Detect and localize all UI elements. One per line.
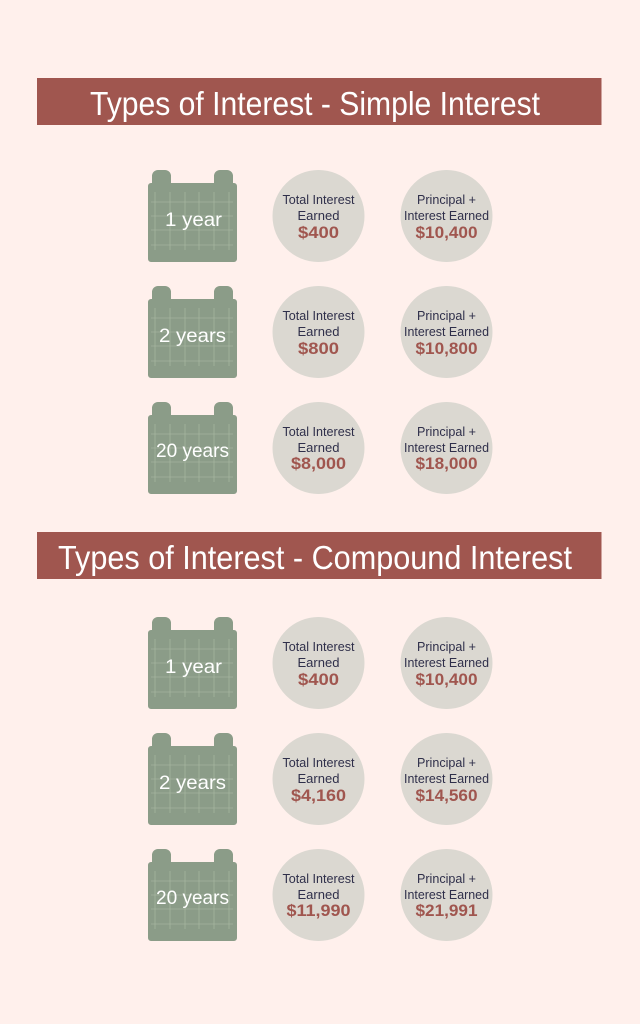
circle: principal plus interest $10,400: Interest Earned <box>404 208 489 223</box>
circle: total interest earned $11,990: Earned <box>298 887 340 902</box>
circle: total interest earned $400: $400 <box>298 670 339 689</box>
circle: total interest earned $11,990: $11,990 <box>286 901 350 920</box>
circle: principal plus interest $10,400: Interest Earned <box>404 655 489 670</box>
row: simple 20 years <box>148 402 492 494</box>
circle: principal plus interest $10,800: Principal + <box>417 308 476 323</box>
circle: principal plus interest $21,991 <box>400 849 492 941</box>
circle: total interest earned $8,000: $8,000 <box>291 454 346 473</box>
circle: principal plus interest $14,560 <box>400 733 492 825</box>
circle: principal plus interest $18,000: $18,000 <box>416 454 478 473</box>
icon: calendar 20 years: 20 years <box>156 440 229 462</box>
icon: calendar 20 years <box>148 402 237 494</box>
circle: total interest earned $400: Total Interest <box>282 639 355 654</box>
circle: principal plus interest $21,991: Interest Earned <box>404 887 489 902</box>
circle: total interest earned $4,160: Total Interest <box>282 755 355 770</box>
circle: principal plus interest $14,560: Principal + <box>417 755 476 770</box>
circle: principal plus interest $10,400: Principal + <box>417 192 476 207</box>
circle: principal plus interest $10,400: $10,400 <box>416 670 478 689</box>
icon: calendar 1 year: 1 year <box>165 656 223 678</box>
circle: total interest earned $4,160: Earned <box>298 771 340 786</box>
circle: total interest earned $400: $400 <box>298 223 339 242</box>
icon: calendar 1 year: 1 year <box>165 209 223 231</box>
circle: principal plus interest $21,991: $21,991 <box>416 901 478 920</box>
circle: total interest earned $400 <box>272 617 364 709</box>
icon: calendar 1 year <box>148 170 237 262</box>
circle: principal plus interest $10,800 <box>400 286 492 378</box>
circle: total interest earned $8,000: Total Interest <box>282 424 355 439</box>
icon: calendar 20 years: 20 years <box>156 887 229 909</box>
circle: principal plus interest $10,400: $10,400 <box>416 223 478 242</box>
title banner: simple interest <box>37 78 602 125</box>
circle: total interest earned $800: Total Interest <box>282 308 355 323</box>
circle: total interest earned $400 <box>272 170 364 262</box>
circle: total interest earned $8,000: Earned <box>298 440 340 455</box>
circle: total interest earned $800: $800 <box>298 339 339 358</box>
circle: total interest earned $400: Total Interest <box>282 192 355 207</box>
circle: principal plus interest $10,800: Interest Earned <box>404 324 489 339</box>
circle: principal plus interest $14,560: $14,560 <box>416 786 478 805</box>
circle: total interest earned $400: Earned <box>298 208 340 223</box>
circle: total interest earned $400: Earned <box>298 655 340 670</box>
row: compound 20 years <box>148 849 492 941</box>
circle: total interest earned $4,160 <box>272 733 364 825</box>
title banner: simple interest: Types of Interest - Simple Interest <box>90 85 540 122</box>
row: compound 2 years <box>148 733 492 825</box>
circle: total interest earned $11,990 <box>272 849 364 941</box>
icon: calendar 2 years <box>148 733 237 825</box>
row: compound 1 year <box>148 617 492 709</box>
circle: principal plus interest $18,000: Principal + <box>417 424 476 439</box>
row: simple 1 year <box>148 170 492 262</box>
circle: total interest earned $800: Earned <box>298 324 340 339</box>
circle: principal plus interest $18,000 <box>400 402 492 494</box>
circle: principal plus interest $14,560: Interest Earned <box>404 771 489 786</box>
circle: principal plus interest $10,400: Principal + <box>417 639 476 654</box>
row: simple 2 years <box>148 286 492 378</box>
circle: principal plus interest $18,000: Interest Earned <box>404 440 489 455</box>
icon: calendar 2 years: 2 years <box>159 772 226 794</box>
icon: calendar 2 years: 2 years <box>159 325 226 347</box>
circle: total interest earned $8,000 <box>272 402 364 494</box>
circle: total interest earned $11,990: Total Interest <box>282 871 355 886</box>
title banner: compound interest: Types of Interest - Compound Interest <box>58 539 572 576</box>
circle: principal plus interest $10,400 <box>400 617 492 709</box>
icon: calendar 1 year <box>148 617 237 709</box>
icon: calendar 2 years <box>148 286 237 378</box>
circle: total interest earned $4,160: $4,160 <box>291 786 346 805</box>
circle: total interest earned $800 <box>272 286 364 378</box>
circle: principal plus interest $10,400 <box>400 170 492 262</box>
circle: principal plus interest $21,991: Principal + <box>417 871 476 886</box>
section: compound interest <box>37 532 602 941</box>
icon: calendar 20 years <box>148 849 237 941</box>
section: simple interest <box>37 78 602 494</box>
circle: principal plus interest $10,800: $10,800 <box>416 339 478 358</box>
